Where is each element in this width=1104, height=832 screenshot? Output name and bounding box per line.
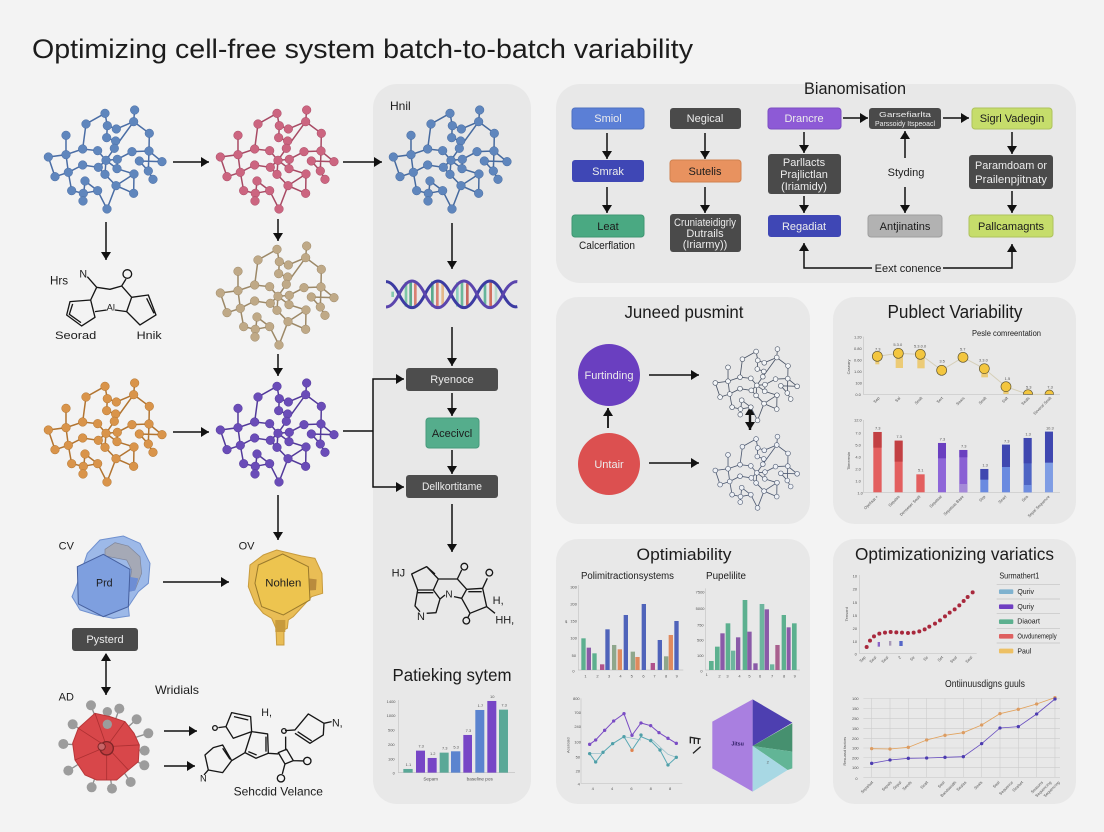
molecule: purple bbox=[216, 379, 338, 486]
icon: root symbol bbox=[690, 737, 701, 753]
flow column 1 bbox=[572, 108, 644, 252]
stacked bar chart: red purple blue: Sepalss bbox=[887, 494, 901, 508]
bar chart: left multi-colour: 200 bbox=[570, 602, 578, 607]
arrows: Juneed bbox=[608, 375, 750, 463]
bar chart: left multi-colour: $ bbox=[565, 619, 568, 624]
dot chart: yellow: 1.20 bbox=[854, 334, 863, 339]
icon: DNA double helix bbox=[386, 281, 517, 308]
flow column 2: (Iriarmy)) bbox=[683, 239, 727, 251]
flow column 2 bbox=[670, 108, 741, 252]
dot chart: yellow bbox=[846, 334, 1060, 416]
hexagon pie chart: Jitsu bbox=[731, 742, 744, 748]
arrows: center panel bbox=[451, 223, 453, 552]
flow column 2: Negical bbox=[687, 113, 723, 125]
molecule: tan bbox=[216, 242, 338, 349]
legend: Surmathert1: Ouvdunemeply bbox=[1017, 634, 1057, 641]
line chart: orange and purple with grid: Sealt bbox=[919, 779, 930, 790]
flow column 2: Cruniateidigrly bbox=[674, 217, 736, 229]
line chart: purple and teal bbox=[566, 696, 682, 791]
dot chart: red curve: 2 bbox=[897, 654, 903, 660]
chemical structure: HJ: N bbox=[417, 611, 425, 623]
stacked bar chart: red purple blue: 10.3 bbox=[1046, 426, 1055, 431]
heading: Publect Variability: Publect Variability bbox=[888, 302, 1022, 322]
panel: Optimiability bbox=[556, 539, 810, 804]
dot chart: yellow: Caseary bbox=[846, 359, 851, 374]
line chart: purple and teal: 240 bbox=[574, 724, 582, 729]
circle: Furtinding: Furtinding bbox=[585, 370, 633, 382]
bar chart: right purple-green: 100 bbox=[697, 653, 704, 658]
dot chart: red curve: 20 bbox=[853, 587, 858, 592]
panel: center column bbox=[373, 84, 531, 804]
virus particle: AD bbox=[58, 691, 153, 794]
label: Wridials: Wridials bbox=[155, 683, 199, 697]
chemical structure: HJ: HH, bbox=[495, 614, 514, 626]
box: Acecivcl: Acecivcl bbox=[432, 428, 472, 440]
flow column 5: Sigrl Vadegin bbox=[980, 113, 1044, 125]
bar chart: right purple-green: 500 bbox=[697, 637, 704, 642]
bar chart: right purple-green: 7500 bbox=[696, 590, 705, 595]
dot chart: red curve: Set bbox=[936, 654, 945, 663]
chemical structure: HJ: H, bbox=[493, 595, 504, 607]
bar chart: left multi-colour: 150 bbox=[570, 619, 578, 624]
chart ticks: bar x axes: 8 bbox=[665, 673, 668, 678]
protein: Nohlen: OV bbox=[239, 540, 255, 552]
stacked bar chart: red purple blue: Seart bbox=[997, 494, 1008, 504]
bar chart: Patieking sytem: 1400 bbox=[387, 699, 396, 704]
stacked bar chart: red purple blue: Denseser Sealt bbox=[899, 494, 922, 517]
line chart: orange and purple with grid: Sealset bbox=[1011, 779, 1025, 793]
flow column 1: Calcerflation bbox=[579, 240, 635, 252]
flow column 4: Antjinatins bbox=[880, 221, 931, 233]
dot chart: yellow: 0.80 bbox=[854, 346, 863, 351]
molecule: blue bbox=[44, 106, 166, 213]
stacked bar chart: red purple blue: 1.3 bbox=[1025, 431, 1032, 436]
flow column 3: Prajlictlan bbox=[780, 169, 828, 181]
line chart: purple and teal: 4 bbox=[578, 781, 581, 786]
flow column 5: Paramdoam or bbox=[975, 160, 1047, 172]
dot chart: yellow: 100 bbox=[855, 381, 863, 386]
stacked bar chart: red purple blue: 12.0 bbox=[854, 418, 863, 423]
legend: Surmathert1: Paul bbox=[1017, 648, 1032, 655]
dot chart: yellow: 7.3 bbox=[875, 347, 881, 352]
dot chart: yellow: Sears bbox=[955, 395, 966, 406]
chart ticks: bar x axes: 7 bbox=[653, 673, 656, 678]
stacked bar chart: red purple blue: Sea bbox=[1020, 494, 1030, 503]
chemical structure: Hrs: Hnik bbox=[137, 330, 162, 342]
arrows: flow diagram bbox=[607, 118, 1012, 268]
panel: flow diagram bbox=[556, 84, 1076, 283]
legend: Surmathert1: Surmathert1 bbox=[999, 571, 1039, 581]
flow column 3: Drancre bbox=[784, 113, 824, 125]
chart ticks: bar x axes: 2 bbox=[718, 673, 721, 678]
bar chart: Patieking sytem bbox=[387, 694, 515, 782]
network: top bbox=[713, 347, 800, 423]
line chart: orange and purple with grid: Seal bbox=[937, 780, 946, 789]
chemical structure: Sehcdid Velance: Sehcdid Velance bbox=[234, 785, 323, 798]
stacked bar chart: red purple blue: Sepalsas Base bbox=[942, 494, 965, 516]
bar chart: Patieking sytem: 1.1 bbox=[406, 762, 412, 767]
dot chart: red curve: 20 bbox=[853, 626, 858, 631]
chemical structure: Hrs: Al bbox=[107, 303, 115, 313]
flow column 5: Pallcamagnts bbox=[978, 221, 1045, 233]
flow column 1: Leat bbox=[597, 221, 619, 233]
stacked bar chart: red purple blue: Sepal Sequence bbox=[1026, 494, 1051, 518]
legend: Surmathert1: Diaoart bbox=[1017, 619, 1040, 626]
line chart: orange and purple with grid: 150 bbox=[852, 706, 859, 711]
stacked bar chart: red purple blue: Tiimeresin bbox=[846, 452, 851, 470]
line chart: orange and purple with grid: Sepalsat bbox=[860, 779, 875, 794]
bar chart: Patieking sytem: 1.7 bbox=[478, 703, 484, 708]
molecule: red bbox=[216, 106, 338, 213]
dot chart: red curve bbox=[844, 573, 977, 664]
stacked bar chart: red purple blue: 7.3 bbox=[875, 426, 881, 431]
chemical structure: Sehcdid Velance: N, bbox=[332, 718, 343, 730]
stacked bar chart: red purple blue: 5.1 bbox=[918, 468, 924, 473]
stacked bar chart: red purple blue bbox=[846, 418, 1060, 518]
dot chart: yellow: Seals bbox=[1020, 395, 1031, 406]
line chart: purple and teal: 800 bbox=[573, 696, 580, 701]
line chart: orange and purple with grid: 150 bbox=[852, 726, 859, 731]
bar chart: Patieking sytem: 7.3 bbox=[466, 728, 472, 733]
chemical structure: Sehcdid Velance: H, bbox=[261, 707, 272, 719]
dot chart: red curve: Seal bbox=[880, 655, 889, 664]
chart ticks: bar x axes: 9 bbox=[794, 673, 797, 678]
chemical structure: HJ bbox=[392, 563, 514, 626]
line chart: purple and teal: 4 bbox=[592, 786, 595, 791]
chemical structure: Hrs bbox=[50, 269, 162, 342]
bar chart: Patieking sytem: baseline pos bbox=[467, 777, 493, 782]
chart ticks: bar x axes: 5 bbox=[631, 673, 634, 678]
label box: Pysterd bbox=[72, 628, 138, 651]
line chart: orange and purple with grid: Seal bbox=[992, 780, 1001, 789]
line chart: orange and purple with grid: Sequencing bbox=[1042, 780, 1061, 798]
chart ticks: bar x axes: 5 bbox=[748, 673, 751, 678]
stacked bar chart: red purple blue: Sepalsat bbox=[928, 494, 943, 509]
dot chart: yellow: 3.3.0 bbox=[979, 357, 989, 362]
stacked bar chart: red purple blue: 1.0 bbox=[857, 490, 864, 495]
line chart: purple and teal: 8 bbox=[669, 786, 672, 791]
line chart: purple and teal: 50 bbox=[576, 755, 581, 760]
chart ticks: bar x axes: 3 bbox=[726, 673, 729, 678]
dot chart: red curve: 0 bbox=[855, 652, 858, 657]
stacked bar chart: red purple blue: 7.3 bbox=[896, 434, 903, 439]
chart ticks: bar x axes: 4 bbox=[619, 673, 622, 678]
panel: Juneed pusmint bbox=[556, 297, 810, 524]
bar chart: Patieking sytem: 1.2 bbox=[430, 751, 436, 756]
subheading: Ontiinuusdigns guuls: Ontiinuusdigns guuls bbox=[945, 678, 1025, 690]
line chart: orange and purple with grid: 100 bbox=[852, 746, 859, 751]
network: bottom bbox=[713, 434, 800, 510]
line chart: orange and purple with grid: 200 bbox=[852, 736, 859, 741]
chart ticks: bar x axes: 0 bbox=[572, 669, 575, 674]
chart ticks: bar x axes: 4 bbox=[738, 673, 741, 678]
bar chart: right purple-green: 750 bbox=[697, 622, 704, 627]
line chart: purple and teal: 20 bbox=[576, 769, 581, 774]
protein: Prd: Prd bbox=[96, 577, 113, 589]
dot chart: red curve: 10 bbox=[853, 639, 858, 644]
bar chart: right purple-green bbox=[696, 588, 800, 670]
bar chart: Patieking sytem: 1000 bbox=[387, 713, 396, 718]
bar chart: Patieking sytem: 7.3 bbox=[501, 703, 508, 708]
bar chart: Patieking sytem: Sepam bbox=[423, 777, 438, 782]
dot chart: yellow: 0.0 bbox=[855, 392, 862, 397]
stacked bar chart: red purple blue: 4.0 bbox=[855, 454, 862, 459]
dot chart: yellow: 5.3 bbox=[1026, 384, 1032, 389]
line chart: orange and purple with grid bbox=[842, 696, 1061, 798]
chart ticks: bar x axes: 2 bbox=[596, 673, 599, 678]
dot chart: yellow: Sep bbox=[872, 395, 881, 404]
dot chart: red curve: 15 bbox=[853, 613, 858, 618]
chemical structure: HJ: N bbox=[445, 590, 453, 601]
box: Dellkortitame bbox=[406, 475, 498, 498]
box: Ryenoce: Ryenoce bbox=[430, 374, 474, 386]
arrow: branch into center panel bbox=[343, 379, 404, 487]
line chart: orange and purple with grid: 100 bbox=[852, 765, 859, 770]
title: Optimizing cell-free system batch-to-batch variability bbox=[32, 34, 694, 64]
protein: Nohlen: Nohlen bbox=[265, 577, 301, 589]
dot chart: yellow: Sert bbox=[935, 395, 945, 404]
legend: Surmathert1: Quriy bbox=[1017, 604, 1035, 611]
label: Eext conence: Eext conence bbox=[875, 263, 941, 275]
circle: Untair: Untair bbox=[594, 459, 624, 471]
flow column 3: (Iriamidy) bbox=[781, 181, 827, 193]
line chart: orange and purple with grid: Seasons bbox=[1030, 780, 1044, 794]
legend: Surmathert1: Quriv bbox=[1017, 589, 1035, 596]
dot chart: red curve: Seal bbox=[868, 655, 877, 664]
flow column 2: Dutrails bbox=[686, 228, 724, 240]
dot chart: red curve: Sep bbox=[858, 654, 867, 663]
dot chart: red curve: 15 bbox=[853, 600, 858, 605]
chart ticks: bar x axes: 6 bbox=[759, 673, 762, 678]
line chart: purple and teal: 6 bbox=[630, 786, 633, 791]
virus particle: AD: AD bbox=[59, 691, 74, 703]
chemical structure: Hrs: Hrs bbox=[50, 274, 68, 287]
flow column 4: Parssoidy Itspeoacl bbox=[875, 119, 935, 128]
line chart: orange and purple with grid: Sepals bbox=[881, 780, 893, 792]
box: Acecivcl bbox=[426, 418, 479, 448]
dot chart: yellow: 5.7 bbox=[960, 346, 966, 351]
flow column 1: Smrak bbox=[592, 166, 624, 178]
bar chart: right purple-green: 5000 bbox=[696, 606, 705, 611]
circle: Furtinding bbox=[578, 344, 640, 406]
bar chart: Patieking sytem: 10 bbox=[490, 694, 495, 699]
chart ticks: bar x axes bbox=[572, 669, 797, 678]
protein: Prd bbox=[59, 536, 150, 618]
dot chart: yellow: 0.60 bbox=[854, 357, 863, 362]
heading: Optimiability: Optimiability bbox=[636, 545, 732, 564]
line chart: orange and purple with grid: Sequencing bbox=[1034, 780, 1052, 798]
chemical structure: Sehcdid Velance: N bbox=[200, 774, 207, 784]
dot chart: yellow: Sal bbox=[894, 395, 901, 403]
chart ticks: bar x axes: 1 bbox=[706, 672, 709, 677]
flow column 1: Smiol bbox=[594, 113, 622, 125]
dot chart: yellow: Salt bbox=[1001, 395, 1010, 404]
dot chart: red curve: Seal bbox=[949, 655, 958, 664]
stacked bar chart: red purple blue: 7.3 bbox=[940, 436, 946, 441]
line chart: purple and teal: 100 bbox=[574, 739, 582, 744]
stacked bar chart: red purple blue: 7.3 bbox=[1004, 439, 1010, 444]
bar chart: Patieking sytem: 0 bbox=[393, 770, 396, 775]
stacked bar chart: red purple blue: 7.0 bbox=[855, 430, 862, 435]
flow column 5: Prailenpjitnaty bbox=[975, 174, 1048, 186]
dot chart: yellow: 1.00 bbox=[854, 369, 863, 374]
protein: Nohlen bbox=[239, 540, 323, 645]
flow column 3 bbox=[768, 108, 841, 237]
hexagon pie chart bbox=[712, 699, 792, 792]
stacked bar chart: red purple blue: Opelisat + bbox=[863, 494, 880, 510]
dot chart: yellow: 5.3.0 bbox=[893, 342, 903, 347]
stacked bar chart: red purple blue: 1.0 bbox=[855, 478, 862, 483]
stacked bar chart: red purple blue: 7.3 bbox=[961, 443, 967, 448]
dot chart: red curve: 10 bbox=[853, 573, 858, 578]
line chart: orange and purple with grid: Sequence bbox=[998, 779, 1015, 796]
chart ticks: bar x axes: 9 bbox=[676, 673, 679, 678]
arrows: left network flow bbox=[106, 162, 382, 766]
stacked bar chart: red purple blue: 1.3 bbox=[982, 463, 989, 468]
line chart: purple and teal: 8 bbox=[650, 786, 653, 791]
chemical structure: Hrs: Seorad bbox=[55, 330, 96, 342]
molecule: center panel blue bbox=[389, 106, 511, 213]
line chart: orange and purple with grid: 100 bbox=[852, 696, 859, 701]
line chart: orange and purple with grid: Sealas bbox=[955, 780, 967, 792]
subheading: Pupelilite: Pupelilite bbox=[706, 571, 746, 582]
chemical structure: Hrs: N bbox=[79, 269, 87, 281]
dot chart: red curve: Se bbox=[922, 654, 930, 662]
flow column 3: Parllacts bbox=[783, 157, 826, 169]
line chart: orange and purple with grid: Bandswidth bbox=[939, 780, 957, 798]
line chart: purple and teal: 700 bbox=[574, 710, 582, 715]
bar chart: left multi-colour bbox=[565, 584, 683, 670]
box: Ryenoce bbox=[406, 368, 498, 391]
chart ticks: bar x axes: 3 bbox=[608, 673, 611, 678]
line chart: purple and teal: 4 bbox=[611, 786, 614, 791]
panel: Optimizationizing variatics bbox=[833, 539, 1076, 804]
stacked bar chart: red purple blue: 5.0 bbox=[855, 442, 862, 447]
line chart: orange and purple with grid: Sepal bbox=[892, 780, 902, 791]
dot chart: yellow: 1.5 bbox=[1005, 376, 1011, 381]
stacked bar chart: red purple blue: Sep bbox=[978, 494, 987, 503]
line chart: orange and purple with grid: 200 bbox=[852, 755, 859, 760]
flow column 3: Regadiat bbox=[782, 221, 826, 233]
circle: Untair bbox=[578, 433, 640, 495]
dot chart: yellow: Several Sealt bbox=[1032, 395, 1053, 416]
line chart: orange and purple with grid: 0 bbox=[855, 776, 858, 781]
line chart: orange and purple with grid: Seals bbox=[973, 780, 983, 790]
bar chart: left multi-colour: 50 bbox=[572, 653, 577, 658]
panel: Publect Variability bbox=[833, 297, 1076, 524]
chemical structure: HJ: HJ bbox=[392, 568, 405, 580]
bar chart: Patieking sytem: 5.3 bbox=[453, 744, 460, 749]
chart ticks: bar x axes: 7 bbox=[771, 673, 774, 678]
center panel label: Hnil: Hnil bbox=[390, 99, 411, 113]
bar chart: Patieking sytem: 7.3 bbox=[418, 744, 425, 749]
flow column 5 bbox=[969, 108, 1053, 237]
stacked bar chart: red purple blue: 2.0 bbox=[855, 466, 862, 471]
chart ticks: bar x axes: 6 bbox=[642, 673, 645, 678]
dot chart: yellow: 7.3 bbox=[1047, 384, 1054, 389]
heading: Patieking sytem: Patieking sytem bbox=[392, 665, 512, 685]
line chart: orange and purple with grid: 250 bbox=[852, 716, 859, 721]
chart ticks: bar x axes: 1 bbox=[584, 673, 587, 678]
subheading: Pesle comreentation: Pesle comreentation bbox=[972, 329, 1041, 338]
label box: Pysterd: Pysterd bbox=[86, 634, 124, 646]
dot chart: red curve: Seal bbox=[964, 655, 973, 664]
legend: Surmathert1 bbox=[997, 571, 1060, 655]
heading: Optimizationizing variatics: Optimizationizing variatics bbox=[855, 544, 1054, 564]
flow column 2: Sutelis bbox=[688, 166, 722, 178]
bar chart: left multi-colour: 100 bbox=[570, 636, 578, 641]
chemical structure: Sehcdid Velance bbox=[200, 707, 343, 798]
dot chart: yellow: Sealt bbox=[977, 395, 988, 405]
bar chart: left multi-colour: 300 bbox=[570, 584, 578, 589]
flow column 4: Styding bbox=[888, 167, 924, 179]
heading: Juneed pusmint: Juneed pusmint bbox=[624, 302, 744, 322]
bar chart: Patieking sytem: 200 bbox=[388, 742, 395, 747]
dot chart: yellow: 5.3.0.0 bbox=[914, 343, 927, 348]
subheading: Polimitractionsystems: Polimitractionsystems bbox=[581, 571, 674, 582]
flow column 4: Garsefiarlta bbox=[879, 110, 932, 119]
protein: Prd: CV bbox=[59, 540, 75, 552]
bar chart: Patieking sytem: 100 bbox=[388, 756, 395, 761]
bar chart: Patieking sytem: 7.3 bbox=[442, 746, 448, 751]
line chart: orange and purple with grid: Seeds bbox=[901, 780, 913, 791]
bar chart: Patieking sytem: 500 bbox=[388, 728, 395, 733]
flow column 4 bbox=[868, 108, 942, 237]
box: Dellkortitame: Dellkortitame bbox=[422, 481, 482, 493]
dot chart: red curve: Tensord bbox=[844, 607, 849, 621]
heading: Bianomisation: Bianomisation bbox=[804, 79, 906, 98]
dot chart: yellow: 3.5 bbox=[939, 359, 946, 364]
dot chart: red curve: Se bbox=[909, 654, 916, 662]
chart ticks: bar x axes: 8 bbox=[783, 673, 786, 678]
line chart: orange and purple with grid: Resuasd factors bbox=[842, 737, 847, 766]
hexagon pie chart: 2 bbox=[767, 759, 770, 764]
molecule: orange bbox=[44, 379, 166, 486]
dot chart: yellow: Sealt bbox=[913, 395, 924, 405]
line chart: purple and teal: Acerosid bbox=[566, 737, 571, 753]
chart ticks: bar x axes: 0 bbox=[700, 669, 703, 674]
